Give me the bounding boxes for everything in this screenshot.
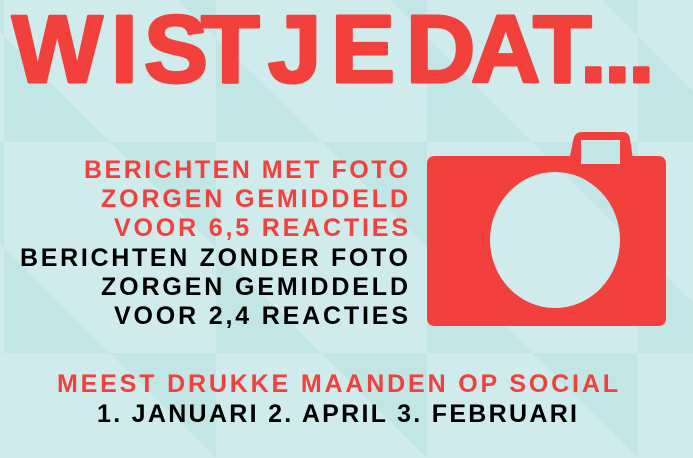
text block: with photo [84,156,408,242]
heading: busiest months: MEEST DRUKKE MAANDEN OP SOCIAL [57,370,618,398]
text block: without photo [20,244,408,330]
icon: camera [427,132,666,326]
list: busiest months ranking: 1. JANUARI 2. APRIL 3. FEBRUARI [97,400,577,428]
text block: with photo: VOOR 6,5 REACTIES [114,214,408,242]
text block: without photo: VOOR 2,4 REACTIES [114,302,408,330]
text block: with photo: ZORGEN GEMIDDELD [101,185,408,213]
text block: without photo: BERICHTEN ZONDER FOTO [20,244,408,272]
text block: without photo: ZORGEN GEMIDDELD [101,273,408,301]
text block: with photo: BERICHTEN MET FOTO [84,156,408,184]
